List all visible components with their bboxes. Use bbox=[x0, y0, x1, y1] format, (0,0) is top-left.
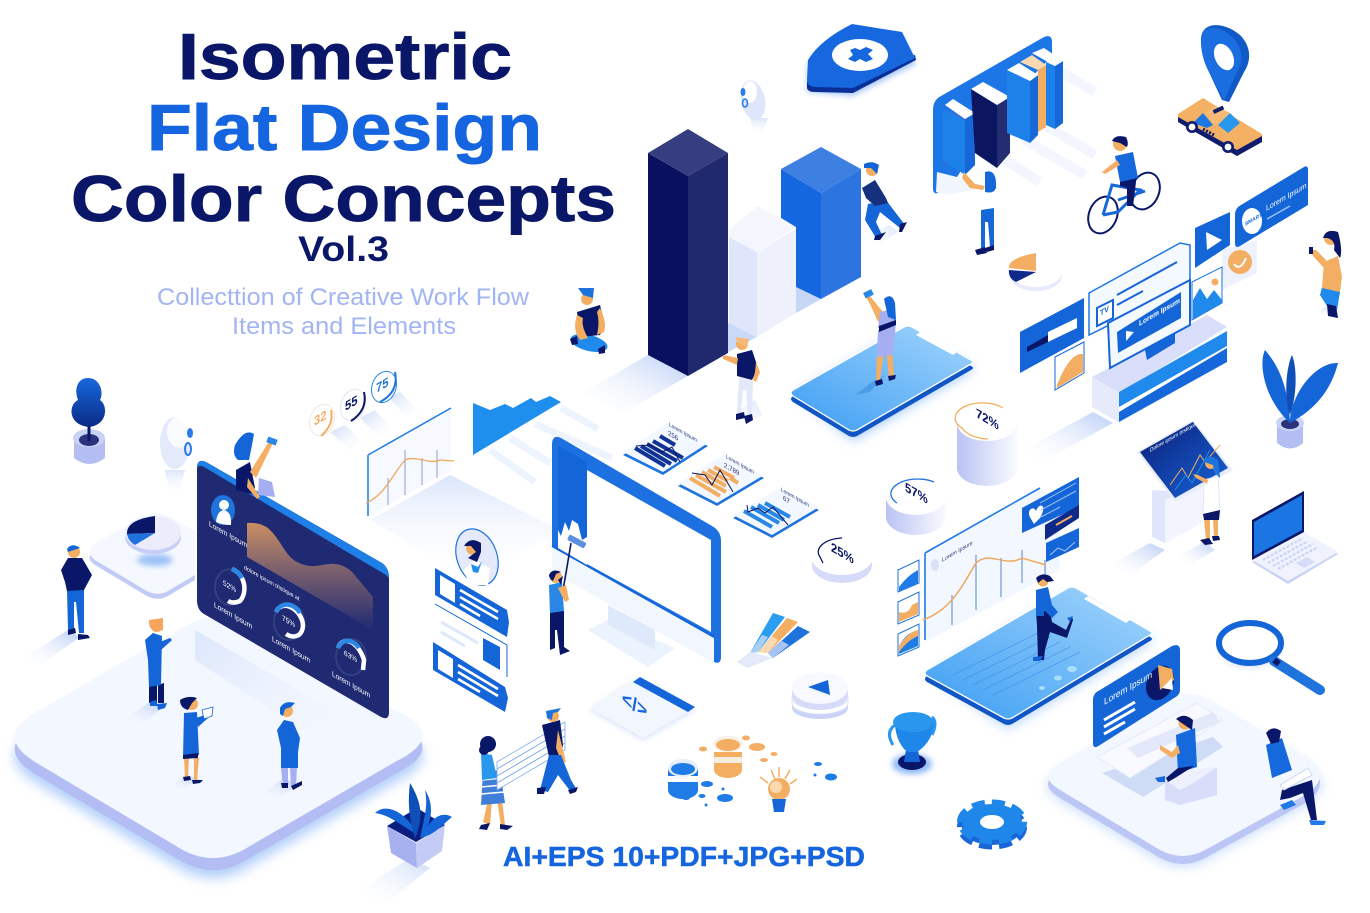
panel: stat cards bbox=[623, 422, 819, 538]
person: runner bbox=[1033, 574, 1073, 661]
icon: play discs bbox=[792, 672, 848, 719]
panel: smart tv cluster: TV bbox=[1100, 304, 1109, 318]
icon: light bulb bbox=[760, 767, 797, 812]
subtitle bbox=[157, 284, 530, 340]
panel: smart tv cluster: Lorem Ipsum bbox=[1266, 181, 1307, 213]
title: Vol.3 bbox=[298, 230, 389, 269]
person: woman on phone bbox=[855, 289, 896, 395]
panel: main platform bbox=[15, 617, 423, 878]
person: sitting man bbox=[569, 288, 609, 355]
panel: dark dashboard bbox=[197, 461, 389, 718]
dashboard labels: Lorem Ipsum bbox=[272, 634, 310, 665]
panel: kiosk bbox=[1110, 420, 1233, 575]
dashboard labels: 52% bbox=[223, 578, 236, 595]
panel: kiosk: Dolore ipsum tristique bbox=[1150, 421, 1196, 454]
panel: large phone bbox=[925, 587, 1154, 728]
person: woman with tablet bbox=[165, 697, 213, 790]
dashboard labels: Lorem Ipsum bbox=[332, 669, 370, 700]
icon: number tags: 75 bbox=[376, 374, 389, 396]
person: man in blue coat bbox=[258, 702, 302, 800]
icon: laptop bbox=[1252, 491, 1338, 584]
icon: number tags bbox=[305, 368, 420, 450]
person: carrying woman bbox=[479, 736, 513, 830]
person: woman with phone bbox=[1309, 231, 1342, 318]
title bbox=[71, 20, 616, 269]
panel: smart tv cluster: SMART bbox=[1245, 212, 1263, 228]
icon: trophy bbox=[889, 712, 935, 774]
panel: pie platform bbox=[90, 513, 195, 599]
icon: doctor avatar bbox=[448, 523, 506, 591]
person: man with cap bbox=[20, 545, 92, 665]
icon: left robot bbox=[160, 416, 193, 495]
icon: 57 percent cylinder: 57% bbox=[905, 479, 928, 507]
panel: carried board bbox=[497, 722, 565, 790]
panel: smart tv cluster: Lorem Ipsum bbox=[1139, 295, 1180, 328]
icon: paint cans and blobs bbox=[668, 736, 837, 806]
panel: smart tv cluster bbox=[1020, 166, 1308, 463]
icon: code card: </> bbox=[622, 687, 647, 723]
icon: shield bbox=[807, 24, 916, 96]
person: seated man bbox=[1155, 716, 1197, 782]
person: woman at shelves bbox=[962, 171, 996, 255]
icon: left plant bbox=[72, 378, 105, 464]
panel: stat cards: Lorem Ipsum bbox=[781, 487, 809, 509]
icon: 72 percent cylinder bbox=[955, 403, 1017, 486]
icon: blue mountain chart bbox=[473, 396, 612, 482]
chart: area curve bbox=[247, 523, 373, 630]
icon: number tags: 55 bbox=[345, 392, 358, 414]
title: Color Concepts bbox=[71, 162, 616, 235]
icon: gear bbox=[961, 804, 1023, 846]
panel: stat cards: 67 bbox=[783, 495, 790, 506]
person: man with laptop bbox=[1266, 728, 1326, 825]
panel: stat cards: Lorem Ipsum bbox=[726, 454, 754, 476]
icon: colour swatches bbox=[737, 613, 810, 668]
icon: bottom-left plant bbox=[360, 783, 452, 905]
icon: avatar bbox=[211, 495, 235, 525]
icon: 72 percent cylinder: 72% bbox=[976, 405, 999, 433]
icon: right pie bbox=[1009, 253, 1062, 291]
person: carrying man bbox=[537, 708, 578, 794]
chart: line panel bbox=[366, 408, 560, 580]
panel: big monitor bbox=[552, 437, 721, 667]
title: Flat Design bbox=[147, 91, 542, 164]
dashboard labels: 75% bbox=[282, 613, 295, 630]
icon: taxi bbox=[1178, 98, 1262, 156]
icon: map pin bbox=[1201, 25, 1249, 102]
person: woman on dashboard bbox=[234, 432, 278, 499]
panel: analytics board bbox=[898, 477, 1079, 656]
icon: number tags: 32 bbox=[314, 407, 327, 429]
subtitle: Items and Elements bbox=[232, 313, 456, 340]
person: painter bbox=[549, 534, 587, 655]
person: cyclist bbox=[1083, 136, 1165, 238]
dashboard labels: Lorem Ipsum bbox=[214, 600, 252, 631]
panel: seat screen: Lorem Ipsum bbox=[1104, 669, 1152, 708]
gauges bbox=[215, 569, 366, 675]
icon: code card bbox=[590, 677, 695, 740]
bar chart: 3D bars bbox=[583, 129, 861, 413]
icon: 57 percent cylinder bbox=[886, 479, 946, 535]
icon: right plant bbox=[1262, 350, 1338, 448]
subtitle: Collecttion of Creative Work Flow bbox=[157, 284, 530, 311]
format list: AI+EPS 10+PDF+JPG+PSD bbox=[503, 841, 865, 872]
icon: 25 percent disc bbox=[812, 538, 872, 583]
panel: stat cards: 256 bbox=[668, 430, 678, 443]
panel: right platform bbox=[1048, 694, 1320, 866]
dashboard labels: Lorem Ipsum bbox=[209, 519, 247, 550]
icon: small robot bbox=[737, 78, 769, 136]
dashboard labels: 63% bbox=[344, 648, 357, 665]
panel: comment cards bbox=[433, 568, 509, 712]
panel: seat screen bbox=[1093, 645, 1180, 747]
panel: server shelves bbox=[933, 36, 1095, 195]
panel: analytics board: Lorem Ipsum bbox=[942, 541, 972, 564]
panel: stat cards: 2,789 bbox=[724, 462, 739, 478]
panel: stat cards: Lorem Ipsum bbox=[669, 422, 697, 444]
title: Isometric bbox=[178, 20, 512, 93]
person: man at dark bar bbox=[723, 337, 762, 428]
person: orange-hair man bbox=[120, 618, 172, 725]
icon: 25 percent disc: 25% bbox=[831, 539, 854, 567]
person: man pushing bar bbox=[862, 162, 907, 248]
dashboard labels: dolore ipsum tristique at bbox=[244, 565, 300, 603]
person: woman at kiosk bbox=[1193, 456, 1220, 545]
icon: magnifying glass bbox=[1219, 623, 1320, 690]
panel: seat box bbox=[1165, 767, 1217, 805]
dashboard labels bbox=[209, 519, 370, 700]
panel: top phone bbox=[791, 326, 975, 440]
